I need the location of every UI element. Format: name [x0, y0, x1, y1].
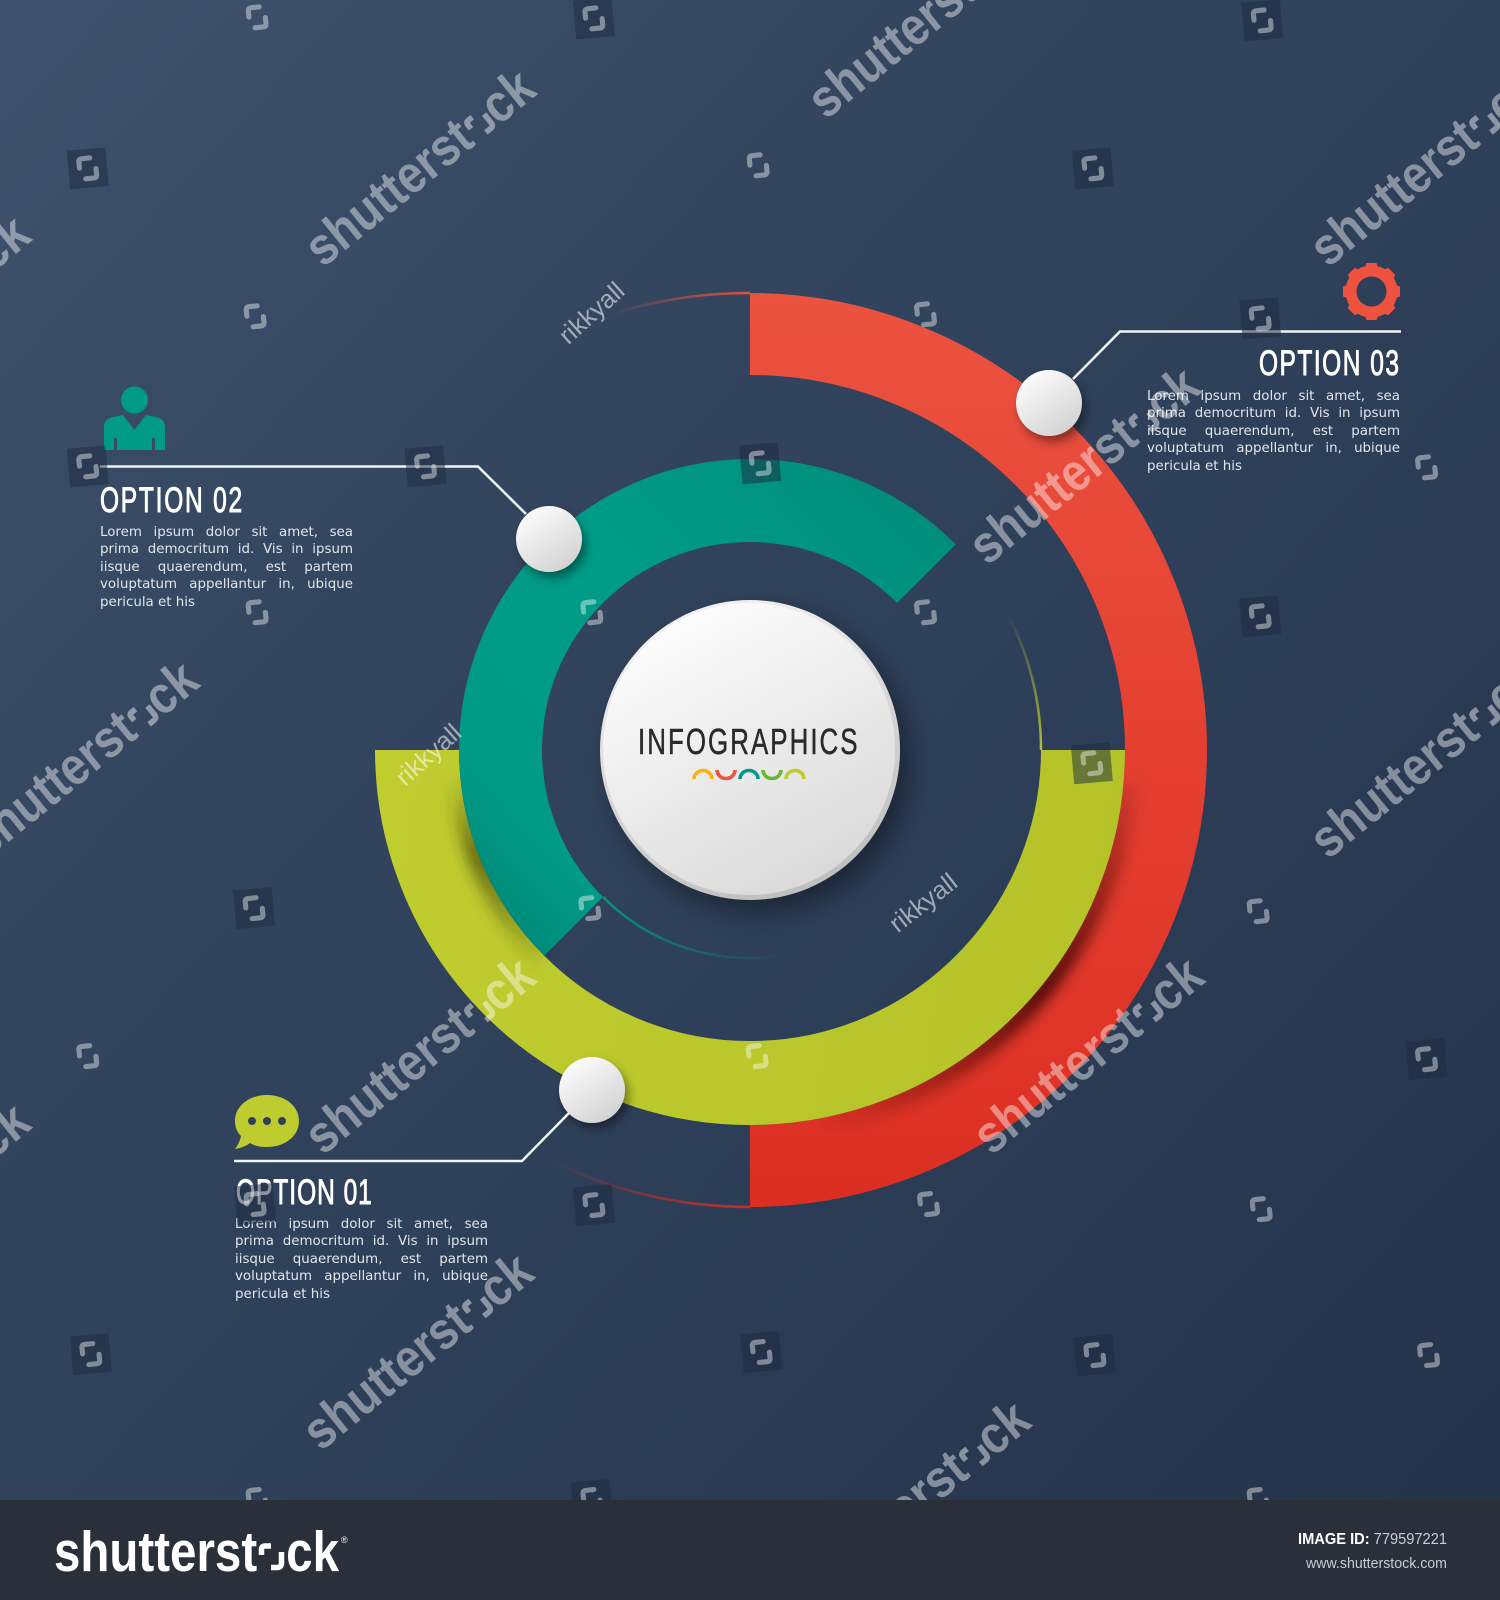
text: option 01: [235, 1217, 488, 1302]
node: option 02: [516, 506, 582, 572]
text: option 02: iisque quaerendum, est partem: [100, 560, 353, 575]
shadow of lime arc: [816, 783, 1127, 1122]
text: option 01: Lorem ipsum dolor sit amet, sea: [235, 1217, 488, 1232]
footer registered mark: ®: [341, 1535, 348, 1545]
text: option 01: voluptatum appellantur in, ubique: [235, 1269, 488, 1284]
node: option 01: [559, 1057, 625, 1123]
arc: red option 03: [750, 334, 1166, 1166]
text: option 02: Lorem ipsum dolor sit amet, sea: [100, 525, 353, 540]
watermark overlay: rikkyall: [884, 868, 963, 938]
text: option 03: prima democritum id. Vis in ipsum: [1147, 406, 1400, 421]
wave of coloured arcs: [694, 770, 804, 779]
text: option 02: pericula et his: [100, 595, 195, 610]
footer url: www.shutterstock.com: [1305, 1555, 1447, 1572]
thin arc: lime: [1007, 613, 1041, 750]
thin arc: red top: [609, 293, 750, 315]
watermark overlay: shutterstock: [291, 1241, 544, 1461]
watermark overlay: shutterstock: [293, 945, 546, 1165]
arc: green option 02: [501, 501, 926, 926]
text: option 03: pericula et his: [1147, 459, 1242, 474]
center title: INFOGRAPHICS: [638, 722, 858, 762]
watermark overlay: rikkyall: [554, 277, 630, 350]
center disc: [600, 600, 900, 900]
footer image id: IMAGE ID: 779597221: [1298, 1531, 1447, 1548]
node: option 03: [1016, 370, 1082, 436]
text: option 01: pericula et his: [235, 1287, 330, 1302]
panel: option 03: [1072, 263, 1401, 474]
icon and leader: option 03: OPTION 03: [1259, 345, 1399, 383]
watermark overlay: rikkyall: [390, 719, 467, 792]
text: option 01: prima democritum id. Vis in ipsum: [235, 1234, 488, 1249]
arc: lime option 01: [417, 750, 1083, 1083]
shadow of green arc: [460, 775, 544, 956]
watermark overlay: shutterstock: [962, 945, 1215, 1165]
icon and leader: option 01: [234, 1095, 570, 1212]
text: option 02: prima democritum id. Vis in ipsum: [100, 542, 353, 557]
panel: option 01: [234, 1095, 570, 1302]
text: option 03: Lorem ipsum dolor sit amet, sea: [1147, 389, 1400, 404]
icon and leader: option 03: [1072, 263, 1401, 383]
icon and leader: option 02: OPTION 02: [100, 482, 242, 520]
watermark overlay: shutterstock: [958, 355, 1211, 576]
icon and leader: option 02: [100, 386, 527, 520]
watermark overlay: shutterstock: [293, 57, 546, 278]
thin arc: red bottom: [543, 1157, 750, 1207]
footer bar: [0, 1500, 1500, 1600]
panel: option 02: [100, 386, 527, 610]
footer logo bracket: [262, 1546, 282, 1568]
text: option 01: iisque quaerendum, est partem: [235, 1252, 488, 1267]
text: option 02: [100, 525, 353, 610]
text: option 03: iisque quaerendum, est partem: [1147, 424, 1400, 439]
footer logo: shutterstock: [54, 1520, 339, 1584]
icon and leader: option 01: OPTION 01: [236, 1174, 372, 1212]
text: option 03: voluptatum appellantur in, ubique: [1147, 441, 1400, 456]
text: option 02: voluptatum appellantur in, ubique: [100, 577, 353, 592]
text: option 03: [1147, 389, 1400, 474]
thin arc: teal: [603, 897, 786, 958]
